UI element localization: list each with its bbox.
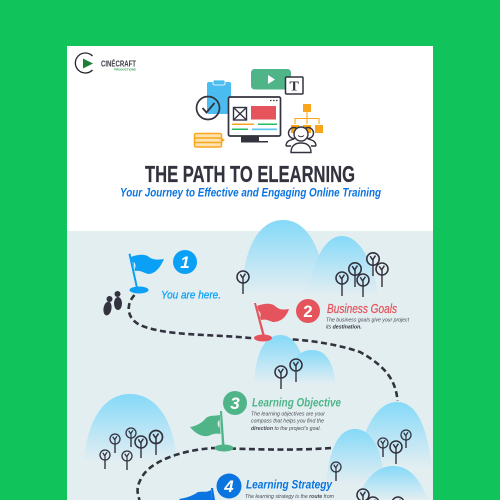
icon: footprints <box>102 291 122 316</box>
logo: PRODUCTIONS <box>114 68 136 72</box>
icon: chat note <box>194 134 225 147</box>
step 4: The learning strategy is the route from <box>245 494 335 500</box>
logo <box>75 53 137 73</box>
step 2: Business Goals <box>327 302 397 316</box>
trees <box>100 253 411 500</box>
icon: people <box>286 127 316 152</box>
step 3 <box>223 391 341 432</box>
step 3: direction to the project's goal. <box>251 426 321 432</box>
icon: text box: T <box>290 80 300 94</box>
logo: CINÉCRAFT <box>101 58 137 68</box>
icon: clipboard with check <box>196 80 231 120</box>
step 3: Learning Objective <box>252 396 341 410</box>
step 2: its destination. <box>326 324 362 330</box>
flag 1 <box>128 254 164 294</box>
flag 3 <box>190 411 234 452</box>
step 4 <box>216 474 335 500</box>
path: upper section <box>129 295 398 401</box>
icon: video player <box>251 69 291 90</box>
step 1: 1 <box>180 253 190 272</box>
panel: journey map <box>67 220 433 500</box>
page card <box>67 46 433 500</box>
step 1 <box>161 250 221 302</box>
step 4: 4 <box>223 477 234 496</box>
step 3: The learning objectives are your <box>251 412 325 418</box>
title: THE PATH TO ELEARNING <box>145 161 355 187</box>
step 2 <box>296 299 410 330</box>
icon: org chart <box>291 104 323 133</box>
step 3: 3 <box>230 394 240 413</box>
path: lower section <box>138 448 331 500</box>
subtitle: Your Journey to Effective and Engaging Online Training <box>120 188 381 200</box>
icon: monitor <box>228 97 280 142</box>
step 1: You are here. <box>161 290 221 302</box>
flag 2 <box>254 303 289 342</box>
icon: text box <box>286 77 303 94</box>
step 2: 2 <box>303 302 313 321</box>
step 4: Learning Strategy <box>246 478 333 492</box>
step 3: compass that helps you find the <box>251 418 324 424</box>
flag 4 <box>179 488 215 500</box>
hills <box>84 220 432 500</box>
step 2: The business goals give your project <box>326 318 410 324</box>
